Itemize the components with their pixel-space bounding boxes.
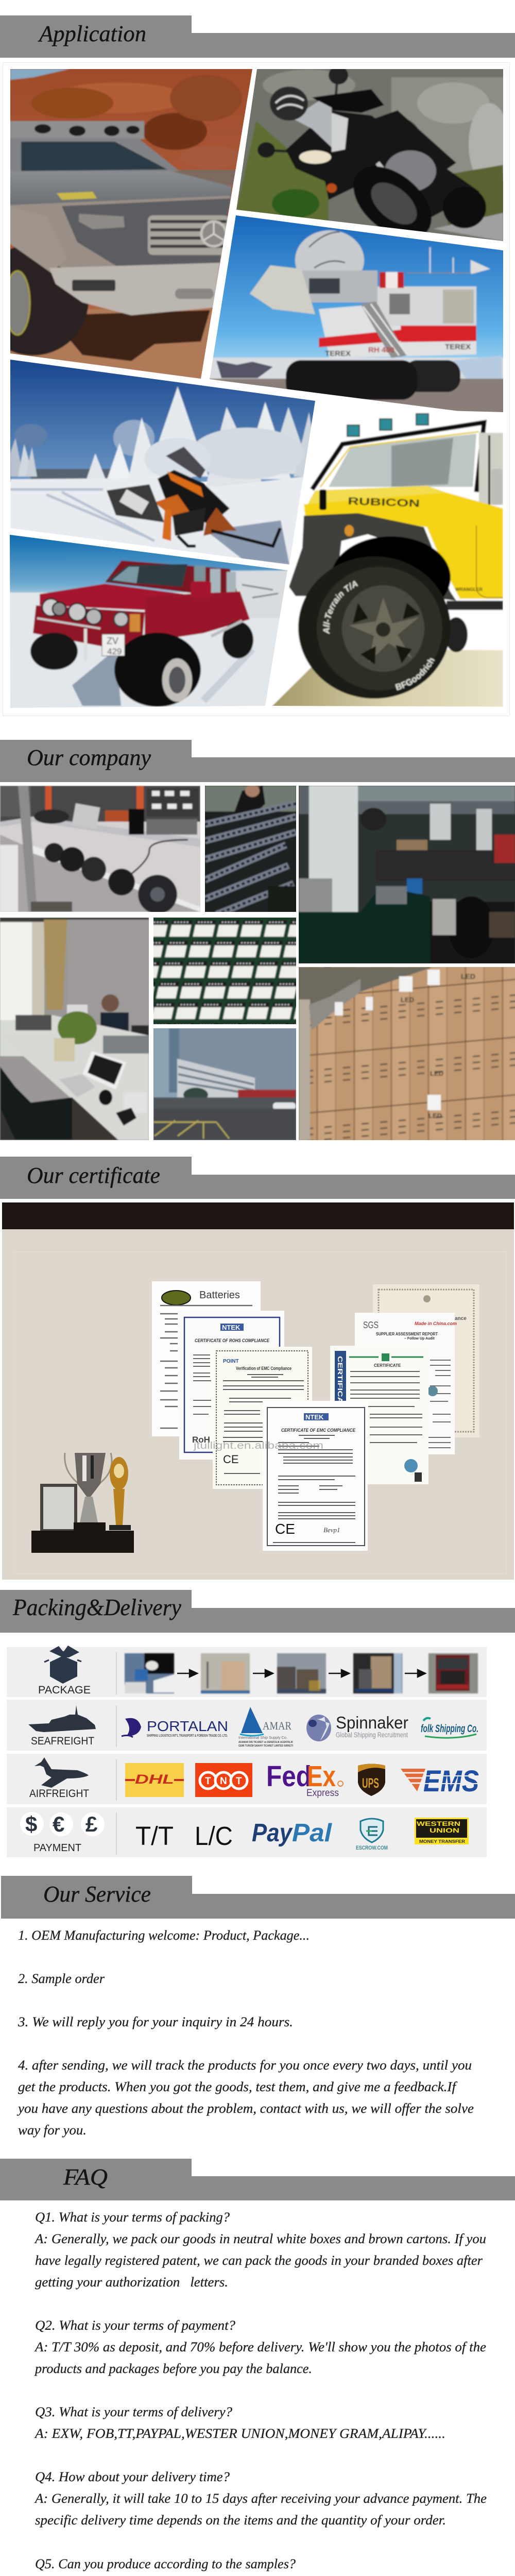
photo: Terex mining excavator: TEREX: [445, 343, 471, 351]
arrow: [253, 1670, 273, 1677]
photo: stacked LED cartons in warehouse: LED: [428, 1112, 442, 1120]
logo: PayPal: [252, 1819, 332, 1847]
photo: container loading: [353, 1653, 402, 1693]
text block: FAQ: Q1. What is your terms of packing?: [35, 2210, 230, 2225]
panel: packing and delivery table: [7, 1646, 487, 1857]
row: airfreight: AIRFREIGHT: [29, 1788, 89, 1800]
logo: Kamar: [238, 1707, 293, 1748]
logo: Spinnaker globe: [306, 1713, 408, 1741]
certificate: gold frame: [373, 1284, 479, 1437]
certificate: gold frame: ance: [455, 1316, 467, 1321]
logo: FedEx Express: Fed: [266, 1760, 312, 1793]
certificate: SGS supplier assessment: – Follow Up Audit: [404, 1337, 435, 1341]
row: seafreight: SEAFREIGHT: [31, 1735, 94, 1747]
section header: Our Service: Our Service: [43, 1882, 151, 1907]
text block: FAQ: specific delivery time depends on the items and the quantity of your order.: [35, 2513, 446, 2528]
text block: FAQ: A: T/T 30% as deposit, and 70% before delivery. We'll show you the photos of the: [34, 2340, 486, 2354]
logo: Spinnaker globe: Global Shipping Recruitment: [336, 1731, 408, 1739]
text block: service list: 4. after sending, we will track the products for you once every two days, until you: [18, 2058, 472, 2073]
photo: stacked LED cartons in warehouse: LED: [461, 972, 475, 980]
section header: Our company: Our company: [27, 745, 151, 770]
logo: TNT: T: [236, 1776, 242, 1787]
logo: Kamar: AMAR: [263, 1719, 291, 1732]
logo: Western Union: [415, 1818, 469, 1844]
icon: jet plane: [35, 1757, 89, 1788]
arrow: [405, 1670, 425, 1677]
watermark: jtullight.en.alibaba.com: [193, 1440, 323, 1451]
certificate: SGS supplier assessment: SUPPLIER ASSESSMENT REPORT: [376, 1332, 438, 1336]
logo: Folk Shipping: folk Shipping Co.: [421, 1723, 478, 1735]
certificate: SGS supplier assessment: SGS: [363, 1320, 379, 1330]
section header: Our Service: [1, 1876, 515, 1919]
section header: Our company: [0, 740, 515, 782]
logo: Kamar: International Ship Supply Co.: [238, 1736, 287, 1740]
logo: Western Union: MONEY TRANSFER: [419, 1839, 465, 1844]
certificate: SGS supplier assessment: Made in China.com: [415, 1321, 457, 1326]
certificate: EMC verification: POINT: [223, 1359, 239, 1364]
photo: stacked LED cartons in warehouse: [296, 964, 515, 1142]
photo: stacked LED cartons in warehouse: LED: [430, 1070, 443, 1077]
icon: currency symbols: €: [53, 1812, 64, 1836]
text block: FAQ: products and packages before you pay the balance.: [34, 2361, 312, 2376]
trophy and award frame: [31, 1453, 134, 1553]
section header: Packing&Delivery: Packing&Delivery: [12, 1594, 182, 1620]
text: T/T: T/T: [135, 1821, 174, 1851]
text block: FAQ: have legally registered patent, we can pack the goods in your branded boxes after: [35, 2253, 483, 2268]
text block: FAQ: getting your authorization letters.: [35, 2275, 228, 2290]
row: airfreight: [7, 1754, 487, 1804]
row: seafreight: [7, 1700, 487, 1751]
text: L/C: L/C: [195, 1821, 233, 1851]
photo: office desk with employee: [0, 915, 152, 1142]
text block: service list: you have any questions about the problem, contact with us, we will offer the solve: [16, 2101, 474, 2116]
row: payment: PAYMENT: [33, 1842, 81, 1854]
logo: Escrow: [356, 1819, 388, 1851]
photo: red off-road SUV on snow: 429: [107, 647, 122, 656]
logo: PayPal: Pal: [292, 1819, 332, 1847]
photo: motorcycle rider leaning: [236, 69, 503, 241]
text block: service list: 3. We will reply you for your inquiry in 24 hours.: [18, 2014, 293, 2029]
certificate: SGS supplier assessment: [355, 1313, 457, 1454]
photo: Terex mining excavator: RH 400: [368, 346, 394, 354]
logo: DHL: [125, 1763, 184, 1797]
certificate: EMC compliance front sheet: [263, 1401, 368, 1551]
text block: FAQ: Q2. What is your terms of payment?: [35, 2318, 235, 2333]
text block: service list: get the products. When you got the goods, test them, and give me a feedback.If: [18, 2079, 458, 2094]
certificate: batteries: Batteries: [199, 1290, 240, 1301]
text block: FAQ: Q3. What is your terms of delivery?: [35, 2404, 232, 2419]
photo: red off-road SUV on snow: [8, 533, 291, 711]
photo: packing workers: [125, 1653, 174, 1693]
certificate: conformity with blue side strip: [330, 1346, 428, 1484]
logo: Kamar: ADAMAR DIS TICARET ve DENIZCILIK ACENTALIK: [238, 1741, 293, 1744]
arrow: [329, 1670, 349, 1677]
row: package: PACKAGE: [38, 1684, 91, 1696]
icon: ship: [28, 1705, 96, 1732]
logo: TNT: [195, 1763, 252, 1797]
logo: FedEx Express: Ex: [307, 1760, 336, 1793]
logo: Western Union: UNION: [430, 1827, 459, 1834]
certificate: RoHS compliance: [179, 1311, 284, 1460]
section header: FAQ: [0, 2159, 515, 2200]
logo: Portalan: [122, 1718, 228, 1738]
photo: worker assembling LED bars: [203, 783, 299, 914]
photo: factory building exterior: [152, 1027, 299, 1143]
icon: open box: [44, 1646, 81, 1684]
photo: yellow Jeep Rubicon wheel: [271, 411, 503, 707]
icon: currency symbols: [20, 1812, 105, 1836]
photo: yellow Jeep Rubicon wheel: BFGoodrich: [394, 657, 436, 691]
photo: yellow Jeep Rubicon wheel: WRANGLER: [455, 587, 483, 592]
certificate: conformity with blue side strip: CERTIFICA: [336, 1356, 344, 1403]
photo: stacked LED cartons in warehouse: LED: [401, 996, 414, 1004]
panel: company photo grid: [0, 783, 515, 1143]
certificate: EMC verification: CE: [223, 1453, 239, 1466]
certificate: RoHS compliance: CERTIFICATE OF ROHS COMPLIANCE: [195, 1338, 270, 1343]
certificate: EMC compliance front sheet: NTEK: [305, 1413, 324, 1421]
certificate: conformity with blue side strip: CERTIFICATE: [374, 1363, 401, 1368]
logo: Kamar: GEMI TURIZM SANAYI TICARET LIMITED SIRKETI: [238, 1744, 293, 1748]
photo: red truck: [428, 1653, 478, 1693]
logo: Portalan: PORTALAN: [147, 1718, 228, 1734]
icon: currency symbols: £: [85, 1812, 97, 1836]
logo: FedEx Express: [266, 1760, 343, 1799]
certificate: RoHS compliance: NTEK: [222, 1324, 241, 1331]
photo: snowmobile among snowy trees: [8, 358, 319, 567]
icon: currency symbols: $: [25, 1812, 37, 1836]
certificate: EMC verification: [213, 1347, 312, 1489]
logo: UPS shield: [358, 1764, 385, 1796]
photo: pallet jack: [277, 1653, 326, 1693]
logo: TNT: T: [205, 1776, 211, 1787]
row: package: [7, 1646, 487, 1697]
text block: FAQ: Q4. How about your delivery time?: [35, 2469, 230, 2484]
logo: DHL: DHL: [135, 1772, 174, 1787]
logo: EMS: EMS: [423, 1765, 479, 1798]
photo: red off-road SUV on snow: ZV: [107, 636, 118, 646]
photo: LED lamp showroom shelves: [0, 783, 203, 914]
certificate: EMC verification: Verification of EMC Compliance: [236, 1366, 291, 1371]
photo: Terex mining excavator: TEREX: [325, 349, 351, 358]
section header: FAQ: FAQ: [63, 2164, 108, 2190]
photo: yellow Jeep Rubicon wheel: All-Terrain T/A: [322, 580, 359, 635]
logo: Western Union: WESTERN: [417, 1820, 460, 1827]
logo: TNT: N: [220, 1776, 227, 1787]
logo: PayPal: Pay: [252, 1819, 293, 1847]
certificate: RoHS compliance: RoH: [192, 1435, 210, 1445]
photo: silver concept truck in desert: [0, 67, 255, 381]
logo: Escrow: ESCROW.COM: [356, 1845, 388, 1851]
text block: FAQ: A: Generally, we pack our goods in neutral white boxes and brown cartons. If you: [34, 2231, 486, 2246]
logo: Spinnaker globe: Spinnaker: [336, 1713, 408, 1732]
photo: Terex mining excavator: [206, 214, 505, 420]
section header: Our certificate: Our certificate: [27, 1163, 160, 1188]
certificate: EMC compliance front sheet: CE: [275, 1521, 295, 1537]
section header: Application: [0, 15, 515, 58]
certificate: EMC compliance front sheet: Bevp1: [323, 1526, 340, 1534]
text block: FAQ: [34, 2210, 489, 2576]
logo: FedEx Express: Express: [306, 1788, 339, 1799]
certificate: EMC compliance front sheet: CERTIFICATE OF EMC COMPLIANCE: [281, 1428, 356, 1433]
logo: UPS shield: UPS: [362, 1775, 379, 1791]
photo: factory floor with white pillars: [296, 783, 515, 966]
photo: yellow Jeep Rubicon wheel: RUBICON: [348, 496, 420, 510]
text block: service list: [16, 1928, 474, 2138]
section header: Packing&Delivery: [0, 1590, 515, 1633]
section header: Our certificate: [0, 1157, 515, 1199]
text block: FAQ: Q5. Can you produce according to the samples?: [35, 2556, 296, 2571]
text block: service list: way for you.: [18, 2123, 87, 2138]
panel: certificates display: [2, 1202, 514, 1580]
certificate: batteries: [152, 1281, 261, 1436]
logo: Folk Shipping: [421, 1718, 478, 1738]
text block: service list: 1. OEM Manufacturing welcome: Product, Package...: [18, 1928, 310, 1943]
section header: Application: Application: [38, 21, 146, 46]
logo: Portalan: SHIPPING LOGISTICS INT'L TRANSPORT & FOREIGN TRADE CO. LTD.: [147, 1733, 228, 1738]
text block: FAQ: A: Generally, it will take 10 to 15 days after receiving your advance payment. The: [34, 2491, 487, 2506]
arrow: [177, 1670, 197, 1677]
photo: wrapped pallets: [201, 1653, 250, 1693]
text block: FAQ: A: EXW, FOB,TT,PAYPAL,WESTER UNION,MONEY GRAM,ALIPAY......: [34, 2426, 445, 2441]
panel: application photo collage: [3, 62, 510, 716]
text block: service list: 2. Sample order: [18, 1971, 105, 1986]
logo: EMS: [401, 1765, 479, 1798]
row: payment: [7, 1807, 487, 1857]
photo: LED bar rows on green floor: [152, 916, 299, 1027]
